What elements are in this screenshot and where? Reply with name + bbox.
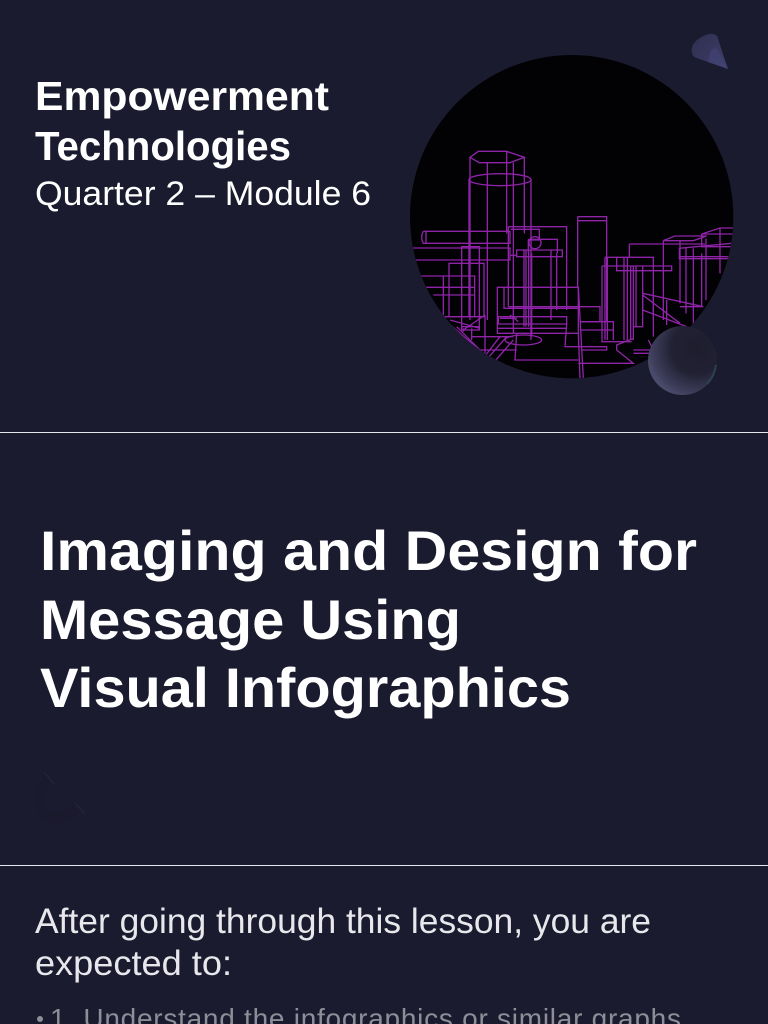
heading: Imaging and Design for Message Using Visual Infographics: Imaging and Design for [40, 519, 697, 582]
icon: faint dark crescent [39, 772, 85, 818]
intro text: After going through this lesson, you are [35, 902, 651, 941]
icon: floating cone [692, 34, 728, 69]
intro text [35, 902, 651, 983]
heading: Imaging and Design for Message Using Visual Infographics: Message Using [40, 588, 461, 651]
heading: Imaging and Design for Message Using Visual Infographics: Visual Infographics [40, 656, 571, 719]
wireframe city buildings [410, 151, 733, 378]
intro text: expected to: [35, 944, 232, 983]
title: Empowerment Technologies: Empowerment [35, 73, 329, 119]
divider line 2 [0, 865, 768, 866]
divider line 1 [0, 432, 768, 433]
illustration: wireframe city in black circle [410, 55, 733, 378]
title: Empowerment Technologies [35, 73, 329, 169]
heading: Imaging and Design for Message Using Visual Infographics [40, 519, 697, 719]
title: Empowerment Technologies: Technologies [35, 123, 291, 169]
icon: floating sphere [648, 326, 717, 395]
subtitle: Quarter 2 – Module 6: Quarter 2 – Module 6 [35, 175, 371, 213]
